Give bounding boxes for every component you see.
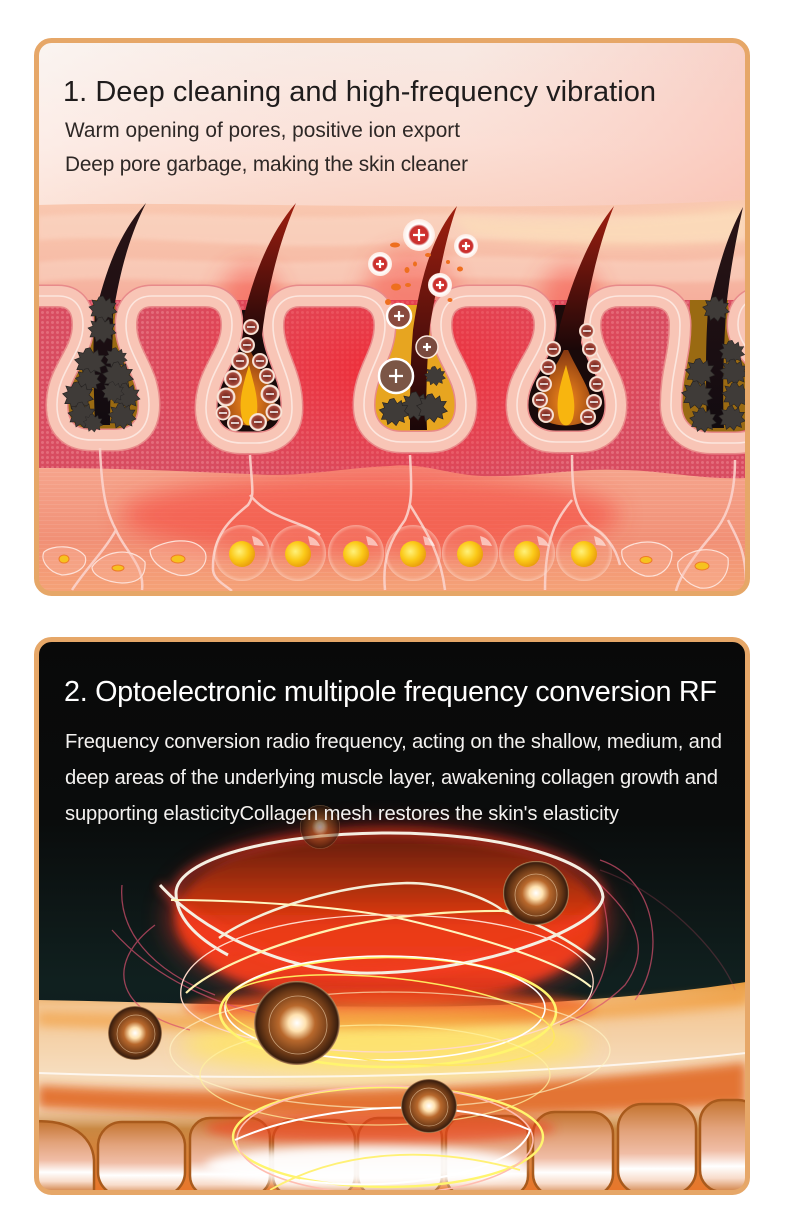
negative ions follicle 2 (216, 319, 282, 431)
heading 2: 2. Optoelectronic multipole frequency conversion RF (64, 676, 717, 708)
description 1: Warm opening of pores, positive ion export (65, 119, 460, 142)
cell glow (205, 1112, 555, 1186)
fat cells: yellow (214, 525, 612, 581)
orbit rings (160, 833, 610, 1194)
description 1: Deep pore garbage, making the skin cleaner (65, 153, 468, 176)
frame 1 (36, 40, 748, 594)
description 1 (65, 119, 468, 176)
red heat glow (166, 826, 610, 1010)
red mesh layer (38, 300, 746, 478)
skin surface layer (39, 200, 745, 300)
upper gradient background (38, 42, 746, 212)
panel: RF (30, 640, 760, 1196)
dirt clusters (63, 296, 750, 432)
energy spheres (108, 805, 569, 1133)
description 2 (65, 731, 722, 825)
faint pink orbit lines (112, 860, 735, 1030)
positive ions (368, 219, 478, 393)
description 2: supporting elasticityCollagen mesh restores the skin's elasticity (65, 803, 620, 825)
follicle cavities (66, 300, 770, 433)
description 2: deep areas of the underlying muscle layer, awakening collagen growth and (65, 767, 718, 789)
heading 1: 1. Deep cleaning and high-frequency vibration (63, 76, 656, 108)
skin cells (30, 1100, 760, 1196)
skin band (38, 982, 746, 1192)
dark background (38, 641, 746, 1041)
lower skin layer (38, 462, 746, 592)
frame 2 (36, 640, 748, 1192)
fat cells: shrunken (43, 541, 728, 588)
follicle walls (20, 296, 782, 443)
panel: deep cleaning (20, 40, 782, 594)
negative ions follicle 4 (532, 323, 605, 425)
description 2: Frequency conversion radio frequency, acting on the shallow, medium, and (65, 731, 722, 753)
band highlights (38, 990, 746, 1117)
hairs (93, 203, 743, 430)
orange particles (385, 242, 463, 305)
nerve lines (72, 448, 746, 591)
